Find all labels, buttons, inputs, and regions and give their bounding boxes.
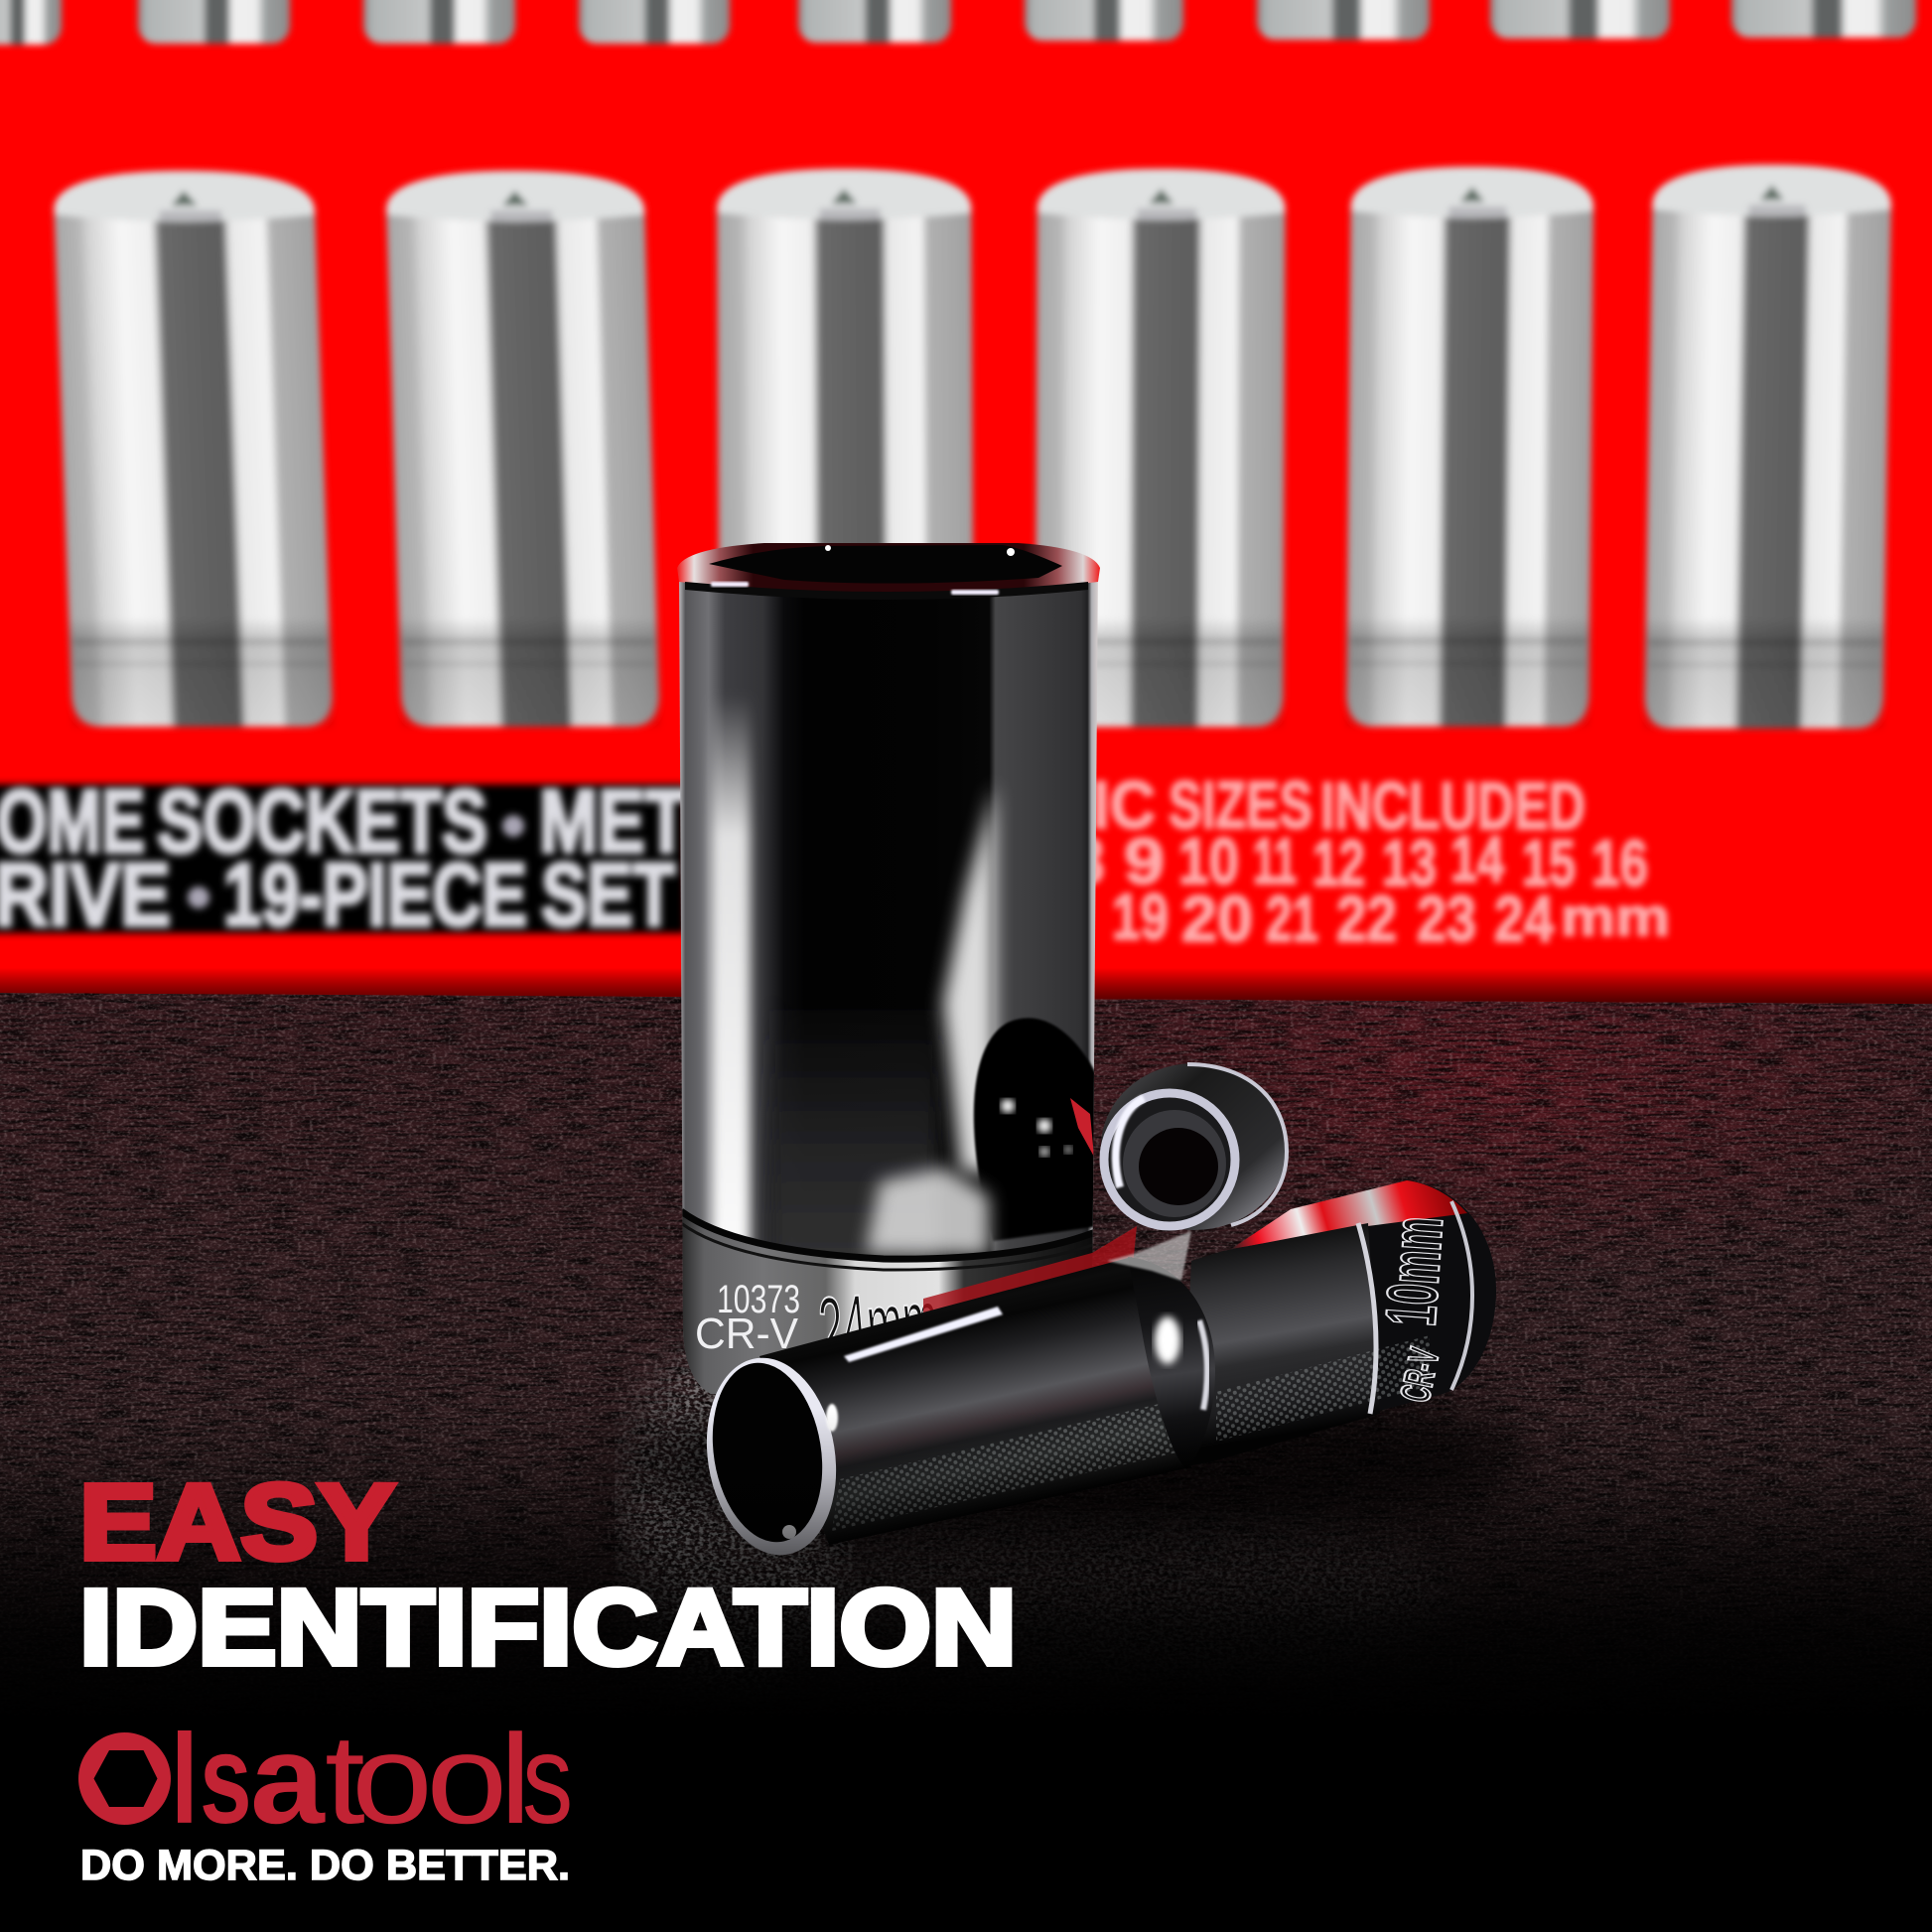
blurred metric sizes text: 10 [1178, 824, 1239, 897]
base collar [679, 1213, 1100, 1410]
blurred label text [0, 781, 681, 934]
engraved part number: 10373 [717, 1278, 800, 1321]
blurred metric sizes text: IC [1092, 767, 1156, 843]
blurred metric sizes text: 23 [1417, 882, 1476, 955]
small socket seen end-on [1101, 1063, 1288, 1230]
thin tube [759, 1257, 1191, 1545]
logo bold letters lsa [171, 1708, 326, 1851]
logo bold letters lsa: s [200, 1708, 252, 1850]
blurred metric sizes text: 14 [1450, 822, 1504, 896]
logo thin letters tools: o [426, 1709, 507, 1851]
blurred metric sizes text: 11 [1253, 824, 1297, 897]
lower glare [866, 1168, 989, 1255]
background socket 3 [711, 163, 979, 549]
bore hole [1139, 1128, 1218, 1205]
red reflection on tube top [923, 1226, 1137, 1325]
blurred label text: SET [541, 846, 675, 945]
blurred metric sizes text: INCLUDED [1320, 768, 1586, 844]
knurled reflection [832, 1402, 1181, 1531]
background socket 1 [53, 171, 334, 727]
blurred metric sizes text: 22 [1336, 882, 1397, 955]
blurred metric sizes text: SIZES [1169, 767, 1312, 843]
reflected bulge of small socket [974, 1018, 1100, 1241]
engraved size marking: CR-V [1391, 1344, 1448, 1406]
tagline: DO MORE. DO BETTER. [80, 1842, 570, 1889]
large chrome socket standing: 24mm [815, 1271, 942, 1380]
background socket 5 [1346, 167, 1593, 727]
brand logo: Olsatools [78, 1708, 573, 1851]
heading word: IDENTIFICATION: IDENTIFICATION [79, 1567, 1017, 1687]
floor reflection glare [625, 1350, 1449, 1688]
background socket 4 [1035, 169, 1286, 727]
logo hexagon O [78, 1732, 171, 1825]
blurred metric sizes text [1096, 774, 1672, 947]
right white reflection [943, 784, 995, 1172]
logo bold letters lsa: a [250, 1708, 326, 1850]
red display board [0, 0, 1932, 1008]
wide body [1181, 1223, 1380, 1467]
ring grooves [1358, 1223, 1376, 1414]
blurred metric sizes text: 21 [1266, 882, 1318, 955]
logo bold letters lsa: l [171, 1709, 199, 1851]
blurred metric sizes text: 9 [1124, 824, 1165, 897]
blurred metric sizes text: mm [1561, 888, 1670, 947]
shadow under the sockets [616, 1370, 1529, 1549]
blurred label text: MET [539, 772, 688, 872]
top row of sockets [0, 0, 1916, 45]
blurred label text: OME [0, 772, 145, 872]
blurred metric sizes text: 16 [1591, 826, 1648, 899]
socket top rim [677, 543, 1100, 600]
logo thin letters tools: o [351, 1709, 433, 1851]
logo thin letters tools: t [325, 1709, 365, 1851]
heading word: EASY: EASY [79, 1461, 395, 1582]
blurred metric sizes text: 19 [1112, 880, 1169, 953]
logo thin letters tools: s [522, 1708, 573, 1851]
socket row [53, 165, 1892, 729]
title [79, 1461, 1017, 1687]
engraved part number [695, 1271, 942, 1380]
end ring [1362, 1180, 1496, 1414]
shoulder highlight [1155, 1316, 1180, 1364]
background socket 2 [385, 171, 660, 727]
black label strip [0, 784, 685, 933]
large chrome socket standing [677, 543, 1100, 1410]
blurred label text: SOCKETS [157, 772, 487, 872]
background socket 6 [1644, 165, 1892, 729]
blurred metric sizes text: 24 [1494, 882, 1554, 955]
socket opening [693, 1348, 850, 1565]
blurred metric sizes text: 20 [1181, 882, 1253, 955]
engraved size marking: 10mm [1371, 1214, 1458, 1328]
blurred metric sizes text: 12 [1312, 826, 1365, 899]
blurred metric sizes text: 8 [1068, 824, 1105, 897]
blurred label text: RIVE [0, 846, 171, 945]
engraved size marking [1371, 1214, 1458, 1406]
bottom dark gradient overlay [0, 1410, 1932, 1932]
chrome socket lying down [693, 1180, 1496, 1565]
shoulder [1128, 1257, 1215, 1469]
blurred metric sizes text: 15 [1522, 826, 1576, 899]
left white reflection [711, 695, 751, 1261]
lower centre reflection [772, 1040, 944, 1255]
top tube highlight [844, 1307, 1003, 1362]
blurred label text: 19-PIECE [223, 846, 527, 945]
logo thin letters tools [325, 1708, 573, 1851]
floor surface [0, 973, 1932, 1932]
engraved part number: CR-V [695, 1310, 799, 1358]
blurred metric sizes text: 13 [1382, 826, 1437, 899]
logo thin letters tools: l [499, 1709, 532, 1851]
